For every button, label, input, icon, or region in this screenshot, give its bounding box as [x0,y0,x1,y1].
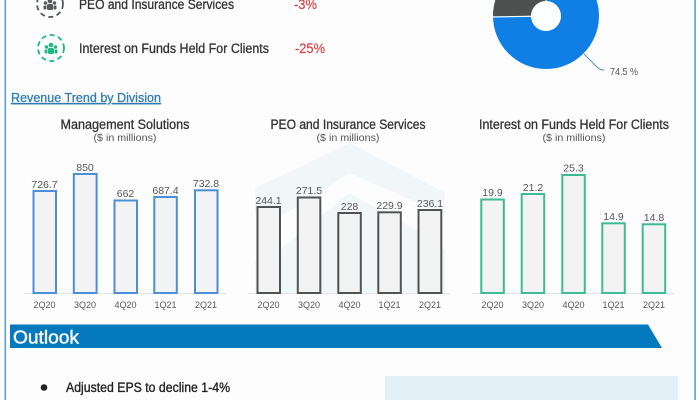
axis labels: 4Q20 [338,300,361,310]
axis labels: 3Q20 [298,300,320,310]
value labels: 236.1 [417,198,443,210]
value labels [482,162,664,224]
axis labels [33,300,217,310]
value labels: 14.9 [603,211,624,223]
icon: interest people [38,35,64,61]
value labels: 229.9 [376,200,403,212]
bars [34,174,218,293]
value labels: 14.8 [644,212,664,224]
value labels: 244.1 [255,195,282,207]
watermark: house [255,143,445,293]
chart: Management Solutions [24,117,226,310]
axis labels: 2Q21 [643,300,665,310]
value labels: 271.5 [296,185,322,197]
value labels: 726.7 [31,179,58,191]
axis labels: 2Q21 [195,300,217,310]
value labels: 662 [117,188,134,200]
value labels: 687.4 [152,185,179,197]
chart subtitle: ($ in millions) [542,132,606,144]
heading: Revenue Trend by Division: Revenue Trend by Division [11,90,161,105]
axis labels [481,300,665,310]
row: Interest on Funds Held For Clients [38,35,325,61]
label: 74.5 %: 74.5 % [610,66,638,78]
value: -25%: -25% [295,41,325,56]
axis labels: 2Q20 [481,300,504,310]
axis labels: 2Q21 [419,300,441,310]
panel: light blue box [385,376,678,400]
value labels: 19.9 [482,187,503,199]
chart subtitle: ($ in millions) [94,132,156,144]
bars [258,198,441,293]
bullet: Adjusted EPS [41,380,230,395]
axis labels: 2Q20 [257,300,280,310]
icon: PEO people [37,0,63,17]
axis labels: 1Q21 [378,300,401,310]
chart: PEO and Insurance Services [248,117,450,310]
value labels: 25.3 [563,162,584,174]
bars [481,175,665,293]
bullet text: Adjusted EPS to decline 1-4% [66,380,230,395]
row: PEO and Insurance Services [37,0,317,17]
value labels: 21.2 [523,182,543,194]
chart title: Interest on Funds Held For Clients [479,117,669,132]
value labels: 228 [341,201,358,213]
leader line [584,54,604,70]
axis labels: 3Q20 [74,300,96,310]
value labels [31,162,219,200]
label: Interest on Funds Held For Clients: Interest on Funds Held For Clients [79,41,269,56]
chart subtitle: ($ in millions) [316,132,380,144]
axis labels [257,300,441,310]
axis labels: 4Q20 [114,300,137,310]
axis labels: 1Q21 [154,300,177,310]
value labels: 850 [76,162,94,174]
banner: Outlook [10,324,662,348]
axis labels: 1Q21 [602,300,625,310]
axis labels: 4Q20 [562,300,585,310]
value labels [255,185,443,213]
chart title: PEO and Insurance Services [270,117,426,132]
axis labels: 2Q20 [33,300,56,310]
chart: Interest on Funds Held For Clients [472,117,674,310]
value labels: 732.8 [193,178,219,190]
donut chart [492,0,638,78]
banner heading: Outlook [13,326,80,348]
chart title: Management Solutions [60,117,190,132]
axis labels: 3Q20 [522,300,544,310]
